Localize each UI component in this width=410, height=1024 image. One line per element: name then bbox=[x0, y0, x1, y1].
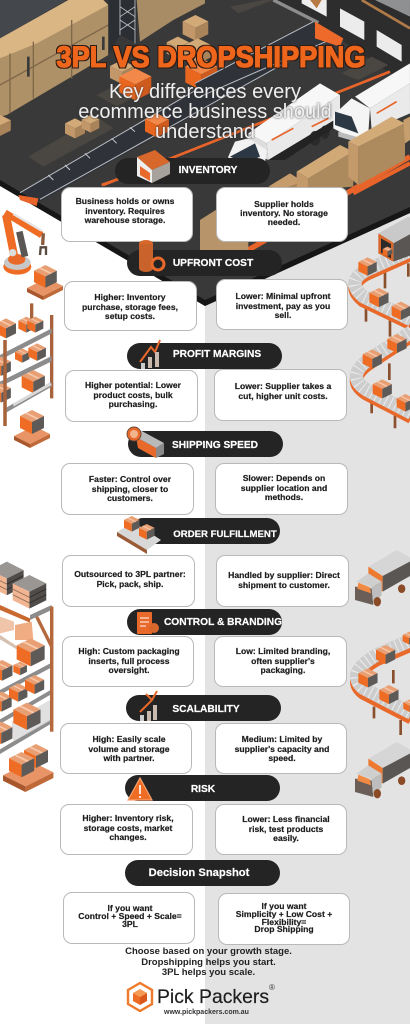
card: risk dropshipping: risk, test products bbox=[249, 824, 323, 834]
truck one bbox=[355, 550, 410, 606]
white truck right bbox=[333, 63, 410, 143]
shelf lower left bbox=[0, 562, 52, 754]
tan crates bbox=[268, 117, 410, 200]
card: choose dropshipping: Flexibility= bbox=[262, 917, 306, 927]
card: margins dropshipping: cut, higher unit costs. bbox=[238, 391, 328, 401]
card: upfront dropshipping: investment, pay as you bbox=[236, 301, 330, 311]
icon: warehouse bbox=[137, 150, 170, 183]
card: risk 3PL: changes. bbox=[109, 832, 147, 842]
card: shipping dropshipping bbox=[215, 463, 348, 515]
section: control and branding heading bbox=[127, 609, 282, 635]
card: upfront dropshipping bbox=[216, 279, 348, 330]
truck two bbox=[355, 742, 410, 798]
card: scalability dropshipping: Medium: Limited by bbox=[242, 734, 322, 744]
card: control 3PL: oversight. bbox=[108, 665, 150, 675]
website: www.pickpackers.com.au bbox=[164, 1009, 249, 1016]
card: choose 3PL: If you want bbox=[108, 903, 152, 913]
icon: warning triangle bbox=[127, 776, 153, 801]
card: fulfillment dropshipping bbox=[216, 555, 349, 607]
card: scalability dropshipping: supplier's capacity and bbox=[235, 744, 329, 754]
card: inventory 3PL bbox=[61, 187, 193, 242]
card: margins 3PL: product costs, bulk bbox=[93, 390, 173, 400]
card: choose dropshipping bbox=[218, 893, 350, 945]
section: shipping speed heading bbox=[128, 431, 283, 457]
card: shipping dropshipping: methods. bbox=[265, 492, 303, 502]
registered mark: ® bbox=[269, 983, 275, 992]
pallet with box top left bbox=[27, 265, 63, 300]
card: shipping dropshipping: supplier location and bbox=[241, 483, 327, 493]
robot arm bbox=[3, 213, 46, 275]
card: control dropshipping: often supplier's bbox=[251, 656, 315, 666]
card: fulfillment 3PL: Pick, pack, ship. bbox=[97, 579, 163, 589]
card: upfront 3PL: purchase, storage fees, bbox=[82, 302, 178, 312]
icon: hexagon box bbox=[126, 982, 154, 1012]
section: upfront cost heading bbox=[127, 250, 282, 276]
card: margins 3PL: Higher potential: Lower bbox=[85, 380, 181, 390]
card: scalability dropshipping bbox=[215, 723, 347, 774]
card: control dropshipping: Low: Limited branding, bbox=[236, 646, 330, 656]
card: upfront dropshipping: sell. bbox=[275, 310, 291, 320]
card: risk dropshipping: easily. bbox=[273, 833, 299, 843]
label: PROFIT MARGINS bbox=[173, 349, 261, 360]
card: margins dropshipping bbox=[214, 369, 347, 421]
card: upfront 3PL: setup costs. bbox=[105, 311, 155, 321]
subtitle: understand bbox=[155, 121, 255, 143]
icon: conveyor with boxes bbox=[117, 516, 161, 554]
card: choose dropshipping: Simplicity + Low Cost + bbox=[236, 909, 332, 919]
card: fulfillment 3PL bbox=[62, 555, 195, 607]
label: SHIPPING SPEED bbox=[172, 440, 258, 451]
card: choose 3PL: Control + Speed + Scale= bbox=[78, 911, 182, 921]
icon: coins and gear bbox=[139, 240, 166, 272]
section: inventory heading bbox=[115, 158, 270, 184]
label: ORDER FULFILLMENT bbox=[173, 529, 277, 540]
section: decision snapshot heading bbox=[125, 860, 280, 886]
closing text: Choose based on your growth stage. bbox=[125, 946, 292, 957]
card: upfront 3PL bbox=[64, 281, 197, 331]
card: inventory 3PL: inventory. Requires bbox=[85, 206, 165, 216]
card: inventory dropshipping bbox=[216, 187, 348, 242]
warehouse floor scene bbox=[0, 0, 410, 306]
card: scalability 3PL bbox=[60, 723, 192, 774]
card: shipping 3PL: shipping, closer to bbox=[92, 484, 168, 494]
card: inventory dropshipping: needed. bbox=[268, 217, 300, 227]
card: fulfillment dropshipping: shipment to customer. bbox=[238, 580, 330, 590]
shelf top left bbox=[0, 303, 52, 426]
subtitle bbox=[78, 81, 332, 143]
card: risk 3PL: storage costs, market bbox=[84, 823, 172, 833]
card: control dropshipping: packaging. bbox=[261, 665, 305, 675]
card: control dropshipping bbox=[214, 636, 347, 687]
card: margins 3PL: purchasing. bbox=[109, 399, 157, 409]
card: choose dropshipping: Drop Shipping bbox=[254, 924, 314, 934]
closing text: 3PL helps you scale. bbox=[162, 967, 255, 978]
card: control 3PL bbox=[62, 636, 194, 687]
card: risk 3PL bbox=[60, 804, 193, 855]
label: RISK bbox=[191, 784, 215, 795]
card: inventory dropshipping: inventory. No storage bbox=[240, 208, 328, 218]
icon: growth chart bbox=[139, 690, 158, 721]
icon: delivery truck and clock bbox=[126, 426, 164, 458]
white truck left bbox=[228, 83, 340, 163]
closing text: Dropshipping helps you start. bbox=[141, 957, 276, 968]
section: order fulfillment heading bbox=[130, 518, 280, 544]
card: fulfillment 3PL: Outsourced to 3PL partner: bbox=[74, 569, 186, 579]
card: choose 3PL: 3PL bbox=[122, 919, 138, 929]
panel: right background bbox=[205, 0, 410, 1024]
label: SCALABILITY bbox=[172, 704, 240, 715]
brand name: Pick Packers bbox=[157, 986, 269, 1008]
conveyor lower right bbox=[357, 632, 410, 735]
card: control 3PL: inserts, full process bbox=[88, 656, 170, 666]
icon: clipboard bbox=[137, 612, 159, 634]
closing text bbox=[125, 946, 292, 978]
subtitle: Key differences every bbox=[109, 81, 301, 103]
card: inventory 3PL: Business holds or owns bbox=[76, 196, 174, 206]
card: risk dropshipping: Lower: Less financial bbox=[242, 814, 330, 824]
card: shipping 3PL: Faster: Control over bbox=[89, 474, 171, 484]
card: margins 3PL bbox=[65, 370, 198, 422]
card: shipping 3PL: customers. bbox=[107, 493, 153, 503]
section: risk heading bbox=[125, 775, 280, 801]
card: upfront dropshipping: Lower: Minimal upfront bbox=[235, 291, 330, 301]
card: control 3PL: High: Custom packaging bbox=[78, 646, 180, 656]
card: risk dropshipping bbox=[215, 804, 347, 855]
section: scalability heading bbox=[126, 695, 281, 721]
scene left half bbox=[0, 0, 333, 206]
label: UPFRONT COST bbox=[173, 258, 253, 269]
card: shipping 3PL bbox=[61, 463, 194, 515]
card: margins dropshipping: Lower: Supplier takes a bbox=[235, 381, 331, 391]
label: Decision Snapshot bbox=[149, 867, 249, 879]
card: scalability 3PL: with partner. bbox=[103, 753, 155, 763]
conveyor top right bbox=[355, 217, 410, 428]
card: upfront 3PL: Higher: Inventory bbox=[94, 292, 166, 302]
card: risk 3PL: Higher: Inventory risk, bbox=[82, 813, 174, 823]
subtitle: ecommerce business should bbox=[78, 101, 332, 123]
card: inventory 3PL: warehouse storage. bbox=[85, 215, 165, 225]
card: scalability 3PL: volume and storage bbox=[88, 744, 170, 754]
card: choose 3PL bbox=[63, 892, 195, 944]
card: inventory dropshipping: Supplier holds bbox=[254, 199, 314, 209]
card: scalability 3PL: High: Easily scale bbox=[92, 734, 166, 744]
card: choose dropshipping: If you want bbox=[262, 901, 306, 911]
scene right half bbox=[103, 0, 410, 260]
section: profit margins heading bbox=[127, 343, 282, 369]
icon: growth chart bbox=[139, 340, 161, 369]
pallet with boxes lower left bbox=[3, 744, 53, 792]
card: shipping dropshipping: Slower: Depends on bbox=[243, 473, 325, 483]
label: CONTROL & BRANDING bbox=[164, 617, 282, 628]
logo: Pick Packers bbox=[126, 982, 275, 1016]
pallet with box lower left bbox=[14, 410, 50, 448]
label: INVENTORY bbox=[179, 165, 237, 176]
card: scalability dropshipping: speed. bbox=[268, 753, 296, 763]
card: fulfillment dropshipping: Handled by supplier: Direct bbox=[228, 570, 340, 580]
